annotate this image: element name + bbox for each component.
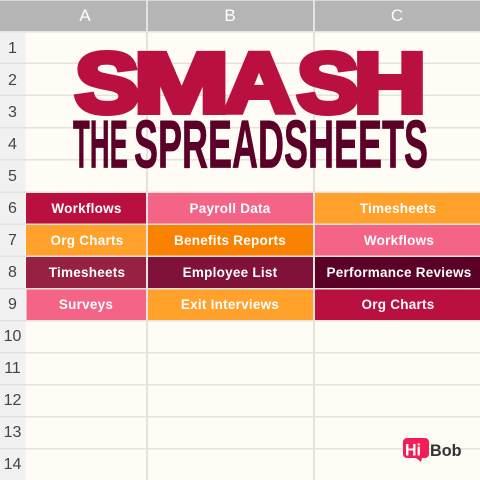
row number gutter: 1 — [8, 40, 17, 57]
row number gutter: 5 — [8, 168, 17, 185]
row number gutter — [0, 31, 26, 480]
row number gutter: 13 — [4, 424, 22, 441]
row 7 cells: Workflows — [364, 233, 434, 248]
row 9 cells — [26, 290, 480, 320]
title: SMASH — [75, 36, 426, 130]
title: SMASH: S — [75, 36, 139, 130]
title: SMASH: M — [134, 36, 229, 130]
row 6 cells — [26, 193, 480, 224]
row number gutter: 14 — [4, 456, 22, 473]
row number gutter: 10 — [4, 328, 22, 345]
row 6 cells: Workflows — [51, 201, 122, 216]
logo: HiBob: Bob — [430, 441, 462, 460]
row 9 cells: Surveys — [59, 297, 113, 312]
row number gutter: 9 — [8, 296, 17, 313]
row 7 cells: Org Charts — [50, 233, 124, 248]
row number gutter: 6 — [8, 200, 17, 217]
row 7 cells: Benefits Reports — [174, 233, 286, 248]
title: SMASH: S — [297, 36, 359, 130]
row 8 cells: Employee List — [183, 265, 278, 280]
row number gutter: 2 — [8, 72, 17, 89]
logo: HiBob — [403, 438, 462, 462]
row 8 cells: Timesheets — [49, 265, 125, 280]
title: THE SPREADSHEETS: THE — [73, 108, 128, 182]
row number gutter: 8 — [8, 264, 17, 281]
row number gutter: 7 — [8, 232, 17, 249]
row 6 cells: Timesheets — [360, 201, 436, 216]
row number gutter: 12 — [4, 392, 22, 409]
row 9 cells: Exit Interviews — [181, 297, 279, 312]
row 8 cells: Performance Reviews — [326, 265, 472, 280]
row 9 cells: Org Charts — [361, 297, 435, 312]
row 6 cells: Payroll Data — [189, 201, 271, 216]
column header bar: A — [79, 6, 91, 25]
row number gutter: 3 — [8, 104, 17, 121]
column header bar — [0, 0, 480, 31]
title: SMASH: H — [354, 36, 426, 130]
column header bar: B — [224, 6, 236, 25]
row 7 cells — [26, 225, 480, 256]
row number gutter: 11 — [4, 360, 21, 377]
title: SMASH: A — [224, 36, 294, 130]
logo: HiBob: Hi — [405, 440, 421, 460]
row number gutter: 4 — [8, 136, 17, 153]
row 8 cells — [26, 257, 480, 288]
column header bar: C — [391, 6, 403, 25]
